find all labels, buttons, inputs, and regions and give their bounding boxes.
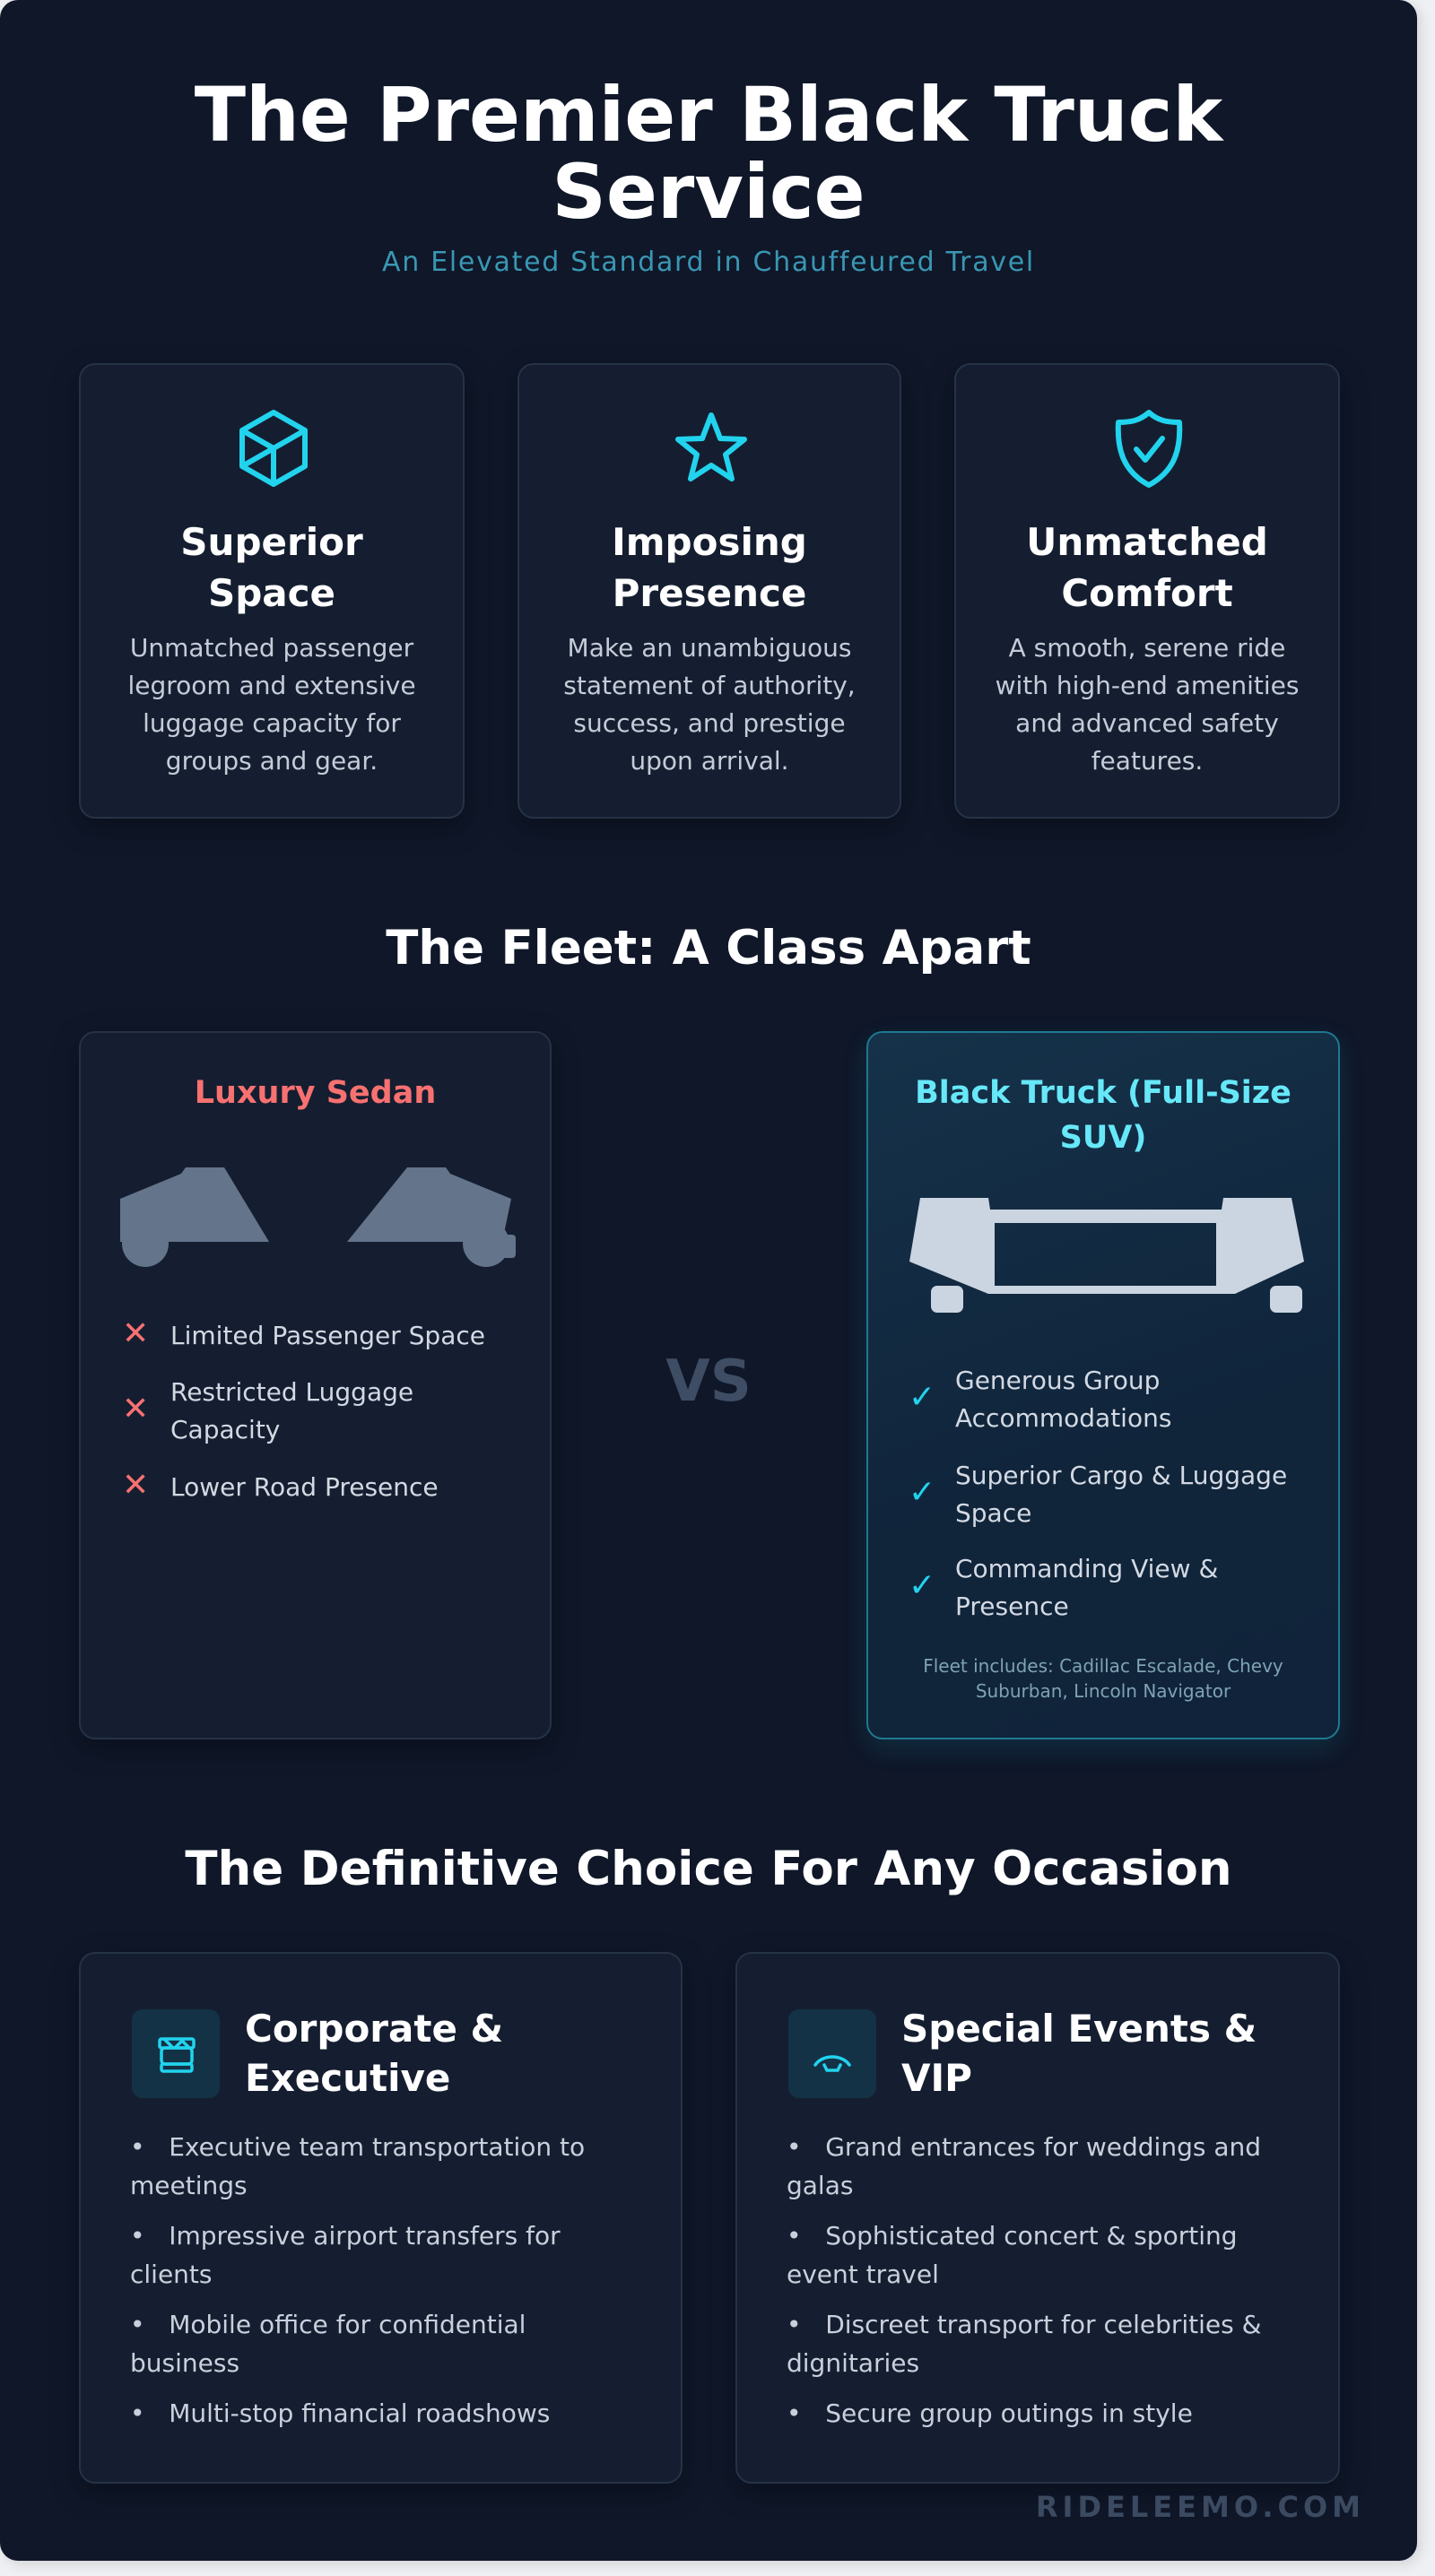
heading [1026, 520, 1268, 615]
text: success, and prestige [573, 708, 846, 738]
truck heading [915, 1075, 1292, 1156]
bullets: • Secure group outings in style [787, 2398, 1193, 2428]
item: Space [955, 1498, 1031, 1528]
text: A smooth, serene ride [1009, 633, 1285, 663]
heading: Superior [180, 520, 363, 564]
fleet note: Suburban, Lincoln Navigator [976, 1680, 1231, 1702]
text: Make an unambiguous [568, 633, 851, 663]
icon: cube [239, 410, 308, 487]
vs label: VS [665, 1349, 752, 1415]
heading: Comfort [1061, 571, 1233, 615]
heading [245, 2007, 503, 2100]
text [127, 633, 416, 776]
icon: vip [788, 2009, 876, 2098]
panel: black truck [866, 1031, 1340, 1739]
title: Service [552, 148, 865, 236]
heading: VIP [901, 2056, 972, 2100]
heading: Presence [613, 571, 806, 615]
heading [180, 520, 363, 615]
footer brand: RIDELEEMO.COM [1036, 2490, 1365, 2524]
text: features. [1091, 746, 1203, 776]
bullets [787, 2132, 1261, 2428]
heading [901, 2007, 1257, 2100]
truck list: ✓ [909, 1474, 935, 1511]
item [122, 1377, 413, 1444]
item: Limited Passenger Space [170, 1321, 485, 1350]
bullets: • Multi-stop financial roadshows [130, 2398, 550, 2428]
heading: Imposing [612, 520, 807, 564]
heading: Special Events & [901, 2007, 1257, 2051]
item [122, 1467, 439, 1504]
bullets: • Sophisticated concert & sporting event travel [787, 2221, 1238, 2289]
icon: shield [1116, 410, 1182, 488]
item: Commanding View & [955, 1554, 1218, 1583]
sedan list: ✕ [122, 1467, 149, 1504]
item: Superior Cargo & Luggage [955, 1461, 1287, 1490]
text: upon arrival. [630, 746, 789, 776]
panel: luxury sedan [79, 1031, 552, 1739]
subtitle: An Elevated Standard in Chauffeured Travel [382, 247, 1035, 278]
icon: sedan [120, 1167, 516, 1267]
item: Presence [955, 1592, 1069, 1621]
text: legroom and extensive [127, 671, 416, 700]
heading: Corporate & [245, 2007, 503, 2051]
item [909, 1554, 1218, 1621]
bullets: • Executive team transportation to meetings [130, 2132, 585, 2200]
bullets [130, 2132, 585, 2428]
icon: star [675, 412, 747, 481]
bullets: • Mobile office for confidential business [130, 2310, 526, 2378]
truck list [909, 1366, 1287, 1621]
sedan heading: Luxury Sedan [195, 1075, 436, 1111]
item: Restricted Luggage [170, 1377, 413, 1407]
item [122, 1315, 485, 1352]
text: Unmatched passenger [130, 633, 413, 663]
sedan list: ✕ [122, 1315, 149, 1352]
heading: Executive [245, 2056, 450, 2100]
panel: imposing presence [517, 363, 901, 819]
text: with high-end amenities [996, 671, 1299, 700]
panel: special events [735, 1952, 1340, 2484]
fleet note [923, 1655, 1283, 1702]
icon: briefcase [132, 2009, 220, 2098]
icon: truck [909, 1198, 1304, 1313]
item: Capacity [170, 1415, 280, 1444]
item: Generous Group [955, 1366, 1160, 1395]
text: statement of authority, [563, 671, 856, 700]
heading: occasions: The Definitive Choice For Any Occasion [185, 1842, 1232, 1896]
sedan list [122, 1315, 485, 1504]
panel: corporate [79, 1952, 683, 2484]
sedan list: ✕ [122, 1391, 149, 1427]
heading: Unmatched [1026, 520, 1268, 564]
text: groups and gear. [166, 746, 378, 776]
item [909, 1461, 1287, 1528]
item: Lower Road Presence [170, 1472, 439, 1502]
text: luggage capacity for [143, 708, 401, 738]
text [996, 633, 1299, 776]
panel: superior space [79, 363, 465, 819]
text: and advanced safety [1015, 708, 1279, 738]
heading: fleet: The Fleet: A Class Apart [386, 921, 1031, 976]
truck list: ✓ [909, 1379, 935, 1416]
heading: Space [208, 571, 335, 615]
bullets: • Grand entrances for weddings and galas [787, 2132, 1261, 2200]
bullets: • Impressive airport transfers for clients [130, 2221, 561, 2289]
title: The Premier Black Truck [195, 71, 1222, 159]
item [909, 1366, 1171, 1433]
heading [612, 520, 807, 615]
truck heading: Black Truck (Full-Size [915, 1075, 1292, 1111]
item: Accommodations [955, 1403, 1171, 1433]
truck list: ✓ [909, 1567, 935, 1604]
fleet note: Fleet includes: Cadillac Escalade, Chevy [923, 1655, 1283, 1677]
truck heading: SUV) [1060, 1120, 1146, 1156]
panel: unmatched comfort [954, 363, 1340, 819]
bullets: • Discreet transport for celebrities & dignitaries [787, 2310, 1261, 2378]
text [563, 633, 856, 776]
title [195, 71, 1224, 236]
